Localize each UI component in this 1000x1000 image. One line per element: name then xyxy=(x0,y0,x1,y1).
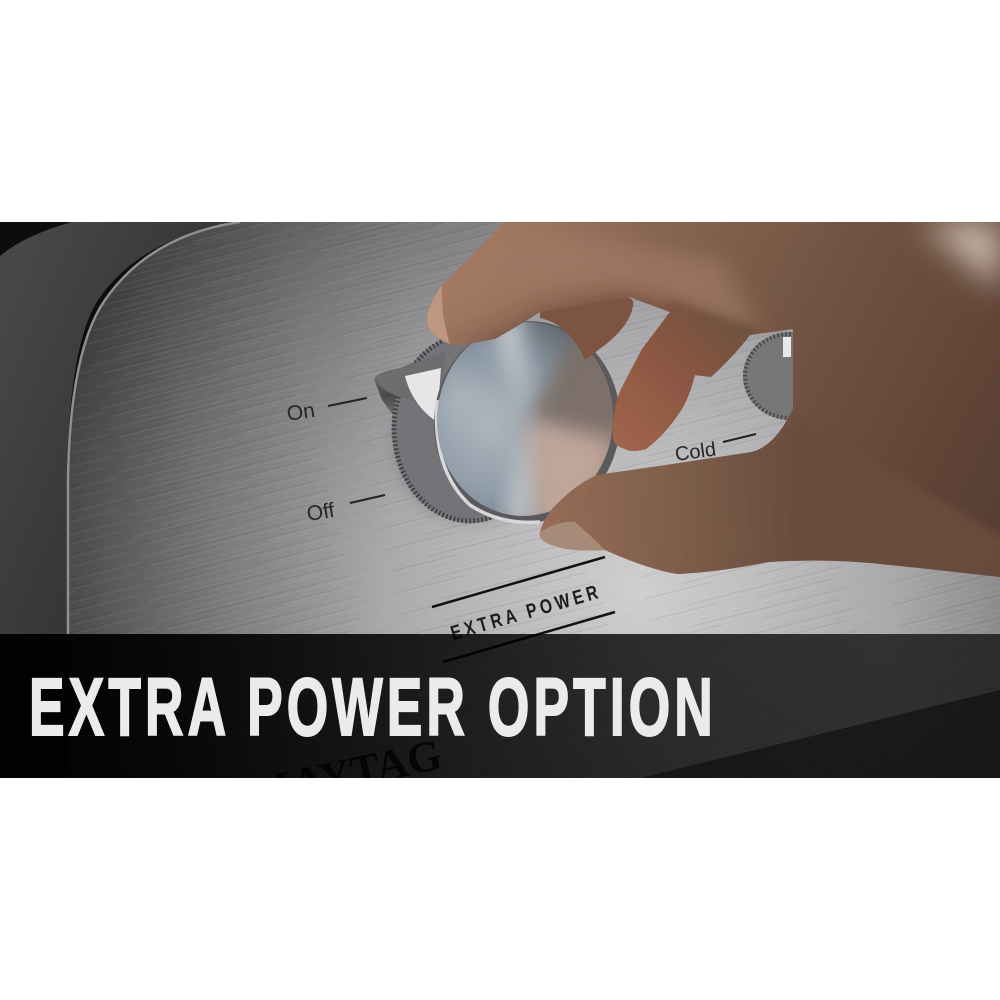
thumbnail xyxy=(540,522,605,550)
thumb xyxy=(540,426,1000,577)
hand xyxy=(400,222,1000,590)
label: Cold xyxy=(676,433,756,460)
fingertip behind dial xyxy=(540,295,634,360)
label: On xyxy=(288,397,368,420)
dark caption strip xyxy=(0,634,1000,778)
label: Extra Power with rules: EXTRA POWER xyxy=(448,581,600,644)
palm highlight xyxy=(920,222,1000,290)
label: Cold: Cold xyxy=(674,438,717,466)
main dial xyxy=(374,321,618,526)
second dial xyxy=(743,332,793,420)
label: On: On xyxy=(285,399,316,426)
dial face reflections xyxy=(439,322,613,516)
logo remnant: MAYTAG xyxy=(247,730,446,818)
label: Off: Off xyxy=(305,499,336,526)
brushed steel panel xyxy=(68,222,1000,778)
index fingernail xyxy=(427,285,450,345)
index finger shading xyxy=(536,244,755,323)
photo panel: washer control dial with hand xyxy=(0,222,1000,778)
dark washer body xyxy=(0,222,232,778)
label: Off xyxy=(308,494,386,520)
label: Extra Power with rules xyxy=(432,557,615,662)
title: EXTRA POWER OPTION xyxy=(29,660,713,753)
middle finger xyxy=(612,300,756,451)
